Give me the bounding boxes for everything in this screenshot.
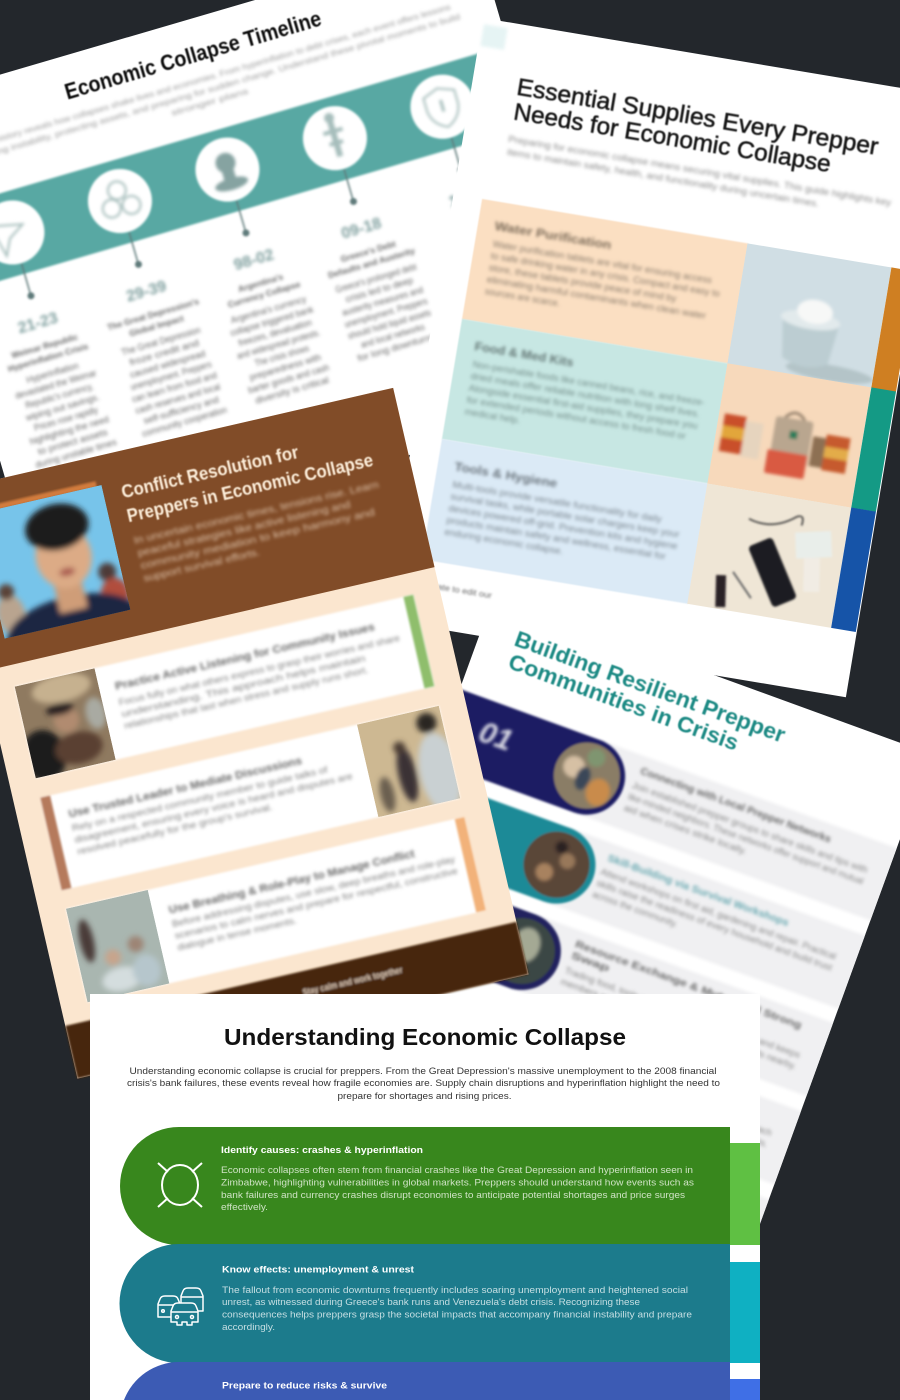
timeline intro text: stronger plans (170, 86, 250, 118)
food photo: cans and first aid kit (707, 363, 872, 508)
timeline years: 29-39 (124, 278, 169, 306)
timeline column body text: wiping out savings. (24, 392, 100, 423)
card 2 brown accent (40, 795, 71, 890)
step 1 text: Economic collapses often stem from financial crashes like the Great Depression and hyperinflation seen in (221, 1165, 693, 1176)
card 2 text: Rely on a respected community member to guide talks of (71, 764, 329, 833)
card 1 text: Practice Active Listening for Community Issues (114, 621, 376, 693)
main intro paragraph: Understanding economic collapse is crucial for preppers. From the Great Depression's massive unemployment to the 2008 financial (130, 1066, 716, 1077)
timeline column body text: froze credit and (128, 338, 200, 368)
tools heading and body: products maintain safety and wellness, essential for (446, 515, 666, 561)
conflict footer band (65, 922, 529, 1079)
card 3 text: Before addressing disputes, use slow, deep breaths and role-play (171, 854, 456, 929)
row 1 text: aid when crises strike locally. (623, 803, 748, 857)
timeline column body text: and widespread protests. (236, 327, 321, 361)
water heading and body (483, 221, 725, 334)
water heading and body: to safe drinking water in any crisis. Compact and easy to (490, 251, 721, 299)
row 2 text (591, 852, 844, 984)
row 3 text: Resource Exchange & Mutual Aid Strong (574, 938, 803, 1032)
row 4 text: Coordinate emergency plans and communications so that each (535, 1043, 773, 1138)
timeline column body text: self-sufficiency and (142, 394, 220, 426)
food heading and body (463, 341, 708, 455)
panel: economic collapse timeline sheet (0, 0, 620, 569)
main intro paragraph: prepare for shortages and rising prices. (338, 1091, 512, 1102)
row 1 number: 01 (474, 715, 517, 758)
timeline column body text (11, 261, 443, 470)
main intro paragraph (127, 1066, 720, 1102)
card 3 text (168, 839, 462, 953)
essential supplies title: Essential Supplies Every Prepper (515, 74, 880, 161)
panel: conflict resolution sheet (0, 388, 529, 1079)
timeline column body text: collapse triggered bank (229, 304, 315, 338)
timeline icons (0, 77, 464, 258)
row 1 water purification block (462, 199, 748, 364)
row 3 text: Swap (569, 950, 611, 975)
step 2 text: consequences helps preppers grasp the societal impacts that accompany financial instability and prepare (222, 1310, 692, 1320)
timeline column headings: Currency Collapse (226, 279, 302, 310)
step 3 pill: prepare (124, 1362, 730, 1400)
card 3 text: scenarios to calm nerves and prepare for respectful, constructive (174, 866, 459, 941)
step 1 text: effectively. (221, 1202, 268, 1213)
header orange strip (0, 481, 97, 515)
row 2 food and med kits block (442, 319, 728, 484)
corner pale patch (480, 24, 508, 50)
row 3 text: members supplied without relying on failing markets nearby. (559, 976, 798, 1071)
row 1 number pill with photo (422, 685, 636, 825)
conflict title: Preppers in Economic Collapse (125, 450, 375, 526)
tools heading and body: devices powered off-grid. Prevention kits and hygiene (448, 503, 678, 551)
step 2 pill: know effects (120, 1244, 730, 1363)
timeline column body text: unemployment. Preppers (129, 359, 213, 392)
row 3 text (559, 938, 812, 1072)
card 3 text: Use Breathing & Role-Play to Manage Conflict (168, 848, 416, 917)
water photo: bowl of tablets (728, 244, 892, 388)
water heading and body: eliminating harmful contaminants when clean water (486, 274, 707, 321)
step 1 text: Zimbabwe, highlighting vulnerabilities in global markets. Preppers should understand how events such as (221, 1178, 694, 1188)
timeline column body text: caused widespread (129, 348, 206, 380)
communities rows clipped to the sheet (0, 388, 898, 1398)
card 2 text: disagreement, ensuring every voice is heard and disputes are (74, 771, 354, 845)
conflict title: Conflict Resolution for (119, 442, 300, 502)
conflict footer text: Stay calm and work together (302, 965, 404, 998)
colored side tabs (831, 267, 900, 632)
timeline stems and dots (18, 136, 465, 300)
row 4 text: Sharing Plans Across Neighborhoods (541, 1028, 733, 1107)
food heading and body: medical help. (464, 406, 521, 426)
timeline column body text: unemployment. Preppers (343, 296, 429, 330)
timeline column body text: The Great Depression (120, 325, 202, 357)
row 1 text: Connecting with Local Prepper Networks (639, 765, 833, 846)
timeline icon circles (0, 67, 482, 272)
card 3: breathing and role play (66, 817, 486, 1002)
essential supplies intro: Preparing for economic collapse means securing vital supplies. This guide highlights key (507, 134, 892, 209)
timeline column body text: barter goods and cash (247, 362, 330, 395)
step 2 text: accordingly. (222, 1322, 275, 1333)
timeline column headings: Greece's Debt (339, 239, 397, 264)
timeline column body text: The crisis shows (254, 343, 311, 368)
timeline column body text: Hyperinflation (25, 360, 80, 385)
timeline column body text: Greece's prolonged debt (334, 262, 418, 295)
timeline column body text: and local networks (360, 322, 426, 350)
timeline years: 21-23 (16, 309, 60, 337)
right side tabs (730, 1143, 760, 1400)
timeline years (16, 183, 491, 337)
timeline column body text: Republic's currency, (24, 381, 94, 411)
panel: communities sheet (257, 591, 900, 1379)
step 1 pill: identify causes (120, 1127, 730, 1245)
card 3 orange accent (455, 817, 486, 913)
conflict header body: support survival efforts. (142, 546, 261, 585)
step 1 text (221, 1145, 694, 1213)
row 3 tools and hygiene block (422, 439, 708, 604)
tools heading and body: survival tasks, while portable solar chargers keep your (450, 491, 680, 539)
step 3 heading: Prepare to reduce risks & survive (222, 1380, 387, 1392)
card 2: trusted leader (40, 704, 468, 900)
water heading and body: sources are scarce. (484, 286, 561, 309)
tools heading and body: enduring economic collapse. (444, 527, 564, 556)
card 3 photo (66, 890, 170, 1002)
timeline column headings: Hyperinflation Crisis (7, 341, 90, 374)
food heading and body: dried meals offer reliable nutrition with long shelf lives. (470, 371, 700, 419)
card 2 text: resolved peacefully for the group's survival. (76, 802, 273, 857)
row 1 text: like-minded neighbors. These networks offer support and mutual (627, 791, 865, 886)
tools heading and body: Tools & Hygiene (453, 462, 558, 491)
main intro paragraph: crisis's bank failures, these events reveal how fragile economies are. Supply chain disruptions and hyperinflation highlight the need to (127, 1078, 720, 1089)
timeline years: 98-02 (232, 246, 276, 274)
icon: three cars (158, 1288, 203, 1325)
timeline column body text: highlighting the need (29, 414, 110, 447)
timeline column body text: for long downturns (356, 331, 436, 363)
conflict header band (0, 388, 435, 671)
conflict header body: community mediation to keep harmony and (139, 506, 376, 572)
tools heading and body (443, 462, 685, 575)
tools heading and body: Multi-tools provide versatile functionality for daily (452, 479, 663, 524)
timeline column body text: preparedness with (248, 352, 322, 382)
card 2 text: Use Trusted Leader to Mediate Discussions (68, 755, 303, 821)
row 2 text: skills raise the readiness of every household and build trust (595, 878, 834, 973)
step 2 text (222, 1264, 692, 1333)
conflict header body (133, 479, 389, 585)
food heading and body: for extended periods without access to fresh food or (466, 395, 687, 441)
water heading and body: Water Purification (494, 221, 612, 252)
step 2 text: unrest, as witnessed during Greece's bank runs and Venezuela's debt crisis. Recognizing these (222, 1297, 640, 1308)
card 1 green accent (403, 595, 434, 688)
row 3 number pill with photo (358, 860, 572, 1001)
communities title: Building Resilient Prepper (511, 626, 789, 748)
timeline column body text: crisis led to deep (344, 275, 414, 304)
card 3 text: dialogue in tense moments. (176, 915, 298, 953)
timeline column headings: Global Impact (128, 313, 185, 338)
card 2 photo (357, 706, 460, 817)
card 1 text: Focus fully on what others express to grasp their worries and share (118, 633, 401, 707)
row 3 text: Trading food, tools and services reduces scarcity and keeps (563, 965, 802, 1060)
row 4 text: group responds quickly and supports one another in a crisis. (531, 1054, 769, 1149)
card 1 photo (14, 668, 116, 778)
timeline column body text: Argentina's currency (230, 294, 308, 325)
icon: circle with crossed lines (158, 1163, 202, 1207)
timeline column headings (3, 234, 416, 374)
step 2 text: Know effects: unemployment & unrest (222, 1264, 415, 1276)
card 1 text: relationships that last when stress and supply runs short. (123, 665, 369, 731)
food heading and body: Non-perishable foods like canned beans, rice, and freeze- (472, 359, 705, 408)
step 1 text: bank failures and currency crashes disrupt economies to anticipate potential shortages and price surges (221, 1190, 685, 1201)
step 2 text: The fallout from economic downturns frequently includes soaring unemployment and heightened social (222, 1285, 688, 1296)
water heading and body: store, these tablets provide peace of mind by (488, 262, 678, 304)
row 2 text: Skill-Building via Survival Workshops (606, 852, 791, 929)
timeline column body text: diversity is critical (254, 375, 330, 406)
step 1 text: Identify causes: crashes & hyperinflation (221, 1145, 423, 1156)
timeline column headings: The Great Depression's (106, 296, 200, 332)
timeline column body text: community cooperation (141, 405, 228, 439)
timeline title: Economic Collapse Timeline (62, 6, 324, 104)
card 1 text (114, 616, 406, 731)
panel: essential supplies sheet (382, 18, 900, 697)
essential supplies intro: items to maintain safety, health, and functionality during uncertain times. (506, 147, 820, 210)
row 1 text: Join established prepper groups to share skills and tips with (631, 780, 869, 875)
food heading and body: Alongside essential first-aid supplies, they prepare you (468, 383, 698, 431)
communities gray row bands (445, 740, 900, 1278)
timeline column body text: Prices rose rapidly (33, 405, 99, 433)
conflict header body: peaceful strategies like active listening and (137, 499, 352, 559)
card 1: active listening (5, 593, 436, 786)
timeline column body text: austerity measures and (341, 285, 424, 318)
main title: Understanding Economic Collapse (224, 1024, 626, 1050)
timeline column body text: should hold liquid assets (347, 307, 432, 341)
timeline column body text: to protect assets (37, 427, 109, 457)
timeline column headings: Defaults and Austerity (327, 245, 416, 280)
panel: understanding economic collapse sheet (90, 994, 760, 1400)
tools photo: phone, tool and packets (687, 484, 851, 628)
timeline column headings: Argentina's (237, 271, 285, 294)
footer partial note: ate to edit our (437, 581, 493, 600)
food heading and body: Food & Med Kits (474, 341, 574, 370)
conflict header body: In uncertain economic times, tensions rise. Learn (133, 479, 380, 547)
timeline column body text: freezes, devaluation (237, 317, 313, 348)
timeline years: 14-18 (447, 183, 491, 211)
essential supplies title: Needs for Economic Collapse (512, 99, 833, 178)
row 2 text: across the community. (591, 889, 679, 929)
timeline teal band (0, 42, 541, 298)
timeline years: 09-18 (339, 215, 384, 243)
row 2 number pill with photo (390, 772, 607, 915)
header photo: smiling boy (0, 485, 130, 638)
timeline column body text: during unstable times (34, 437, 118, 470)
card 1 text: understanding. This approach helps maintain (120, 653, 366, 719)
timeline column body text: devastated the Weimar (14, 368, 98, 401)
communities title: Communities in Crisis (505, 649, 742, 756)
water heading and body: Water purification tablets are vital for ensuring access (492, 239, 713, 285)
timeline column body text: can learn from food and (131, 370, 218, 404)
timeline column body text: cash reserves and local (134, 382, 221, 416)
row 2 text: Attend workshops on first aid, gardening and repair. Practical (599, 867, 838, 961)
timeline column headings: Weimar Republic (10, 331, 79, 360)
card 2 text (68, 745, 356, 857)
